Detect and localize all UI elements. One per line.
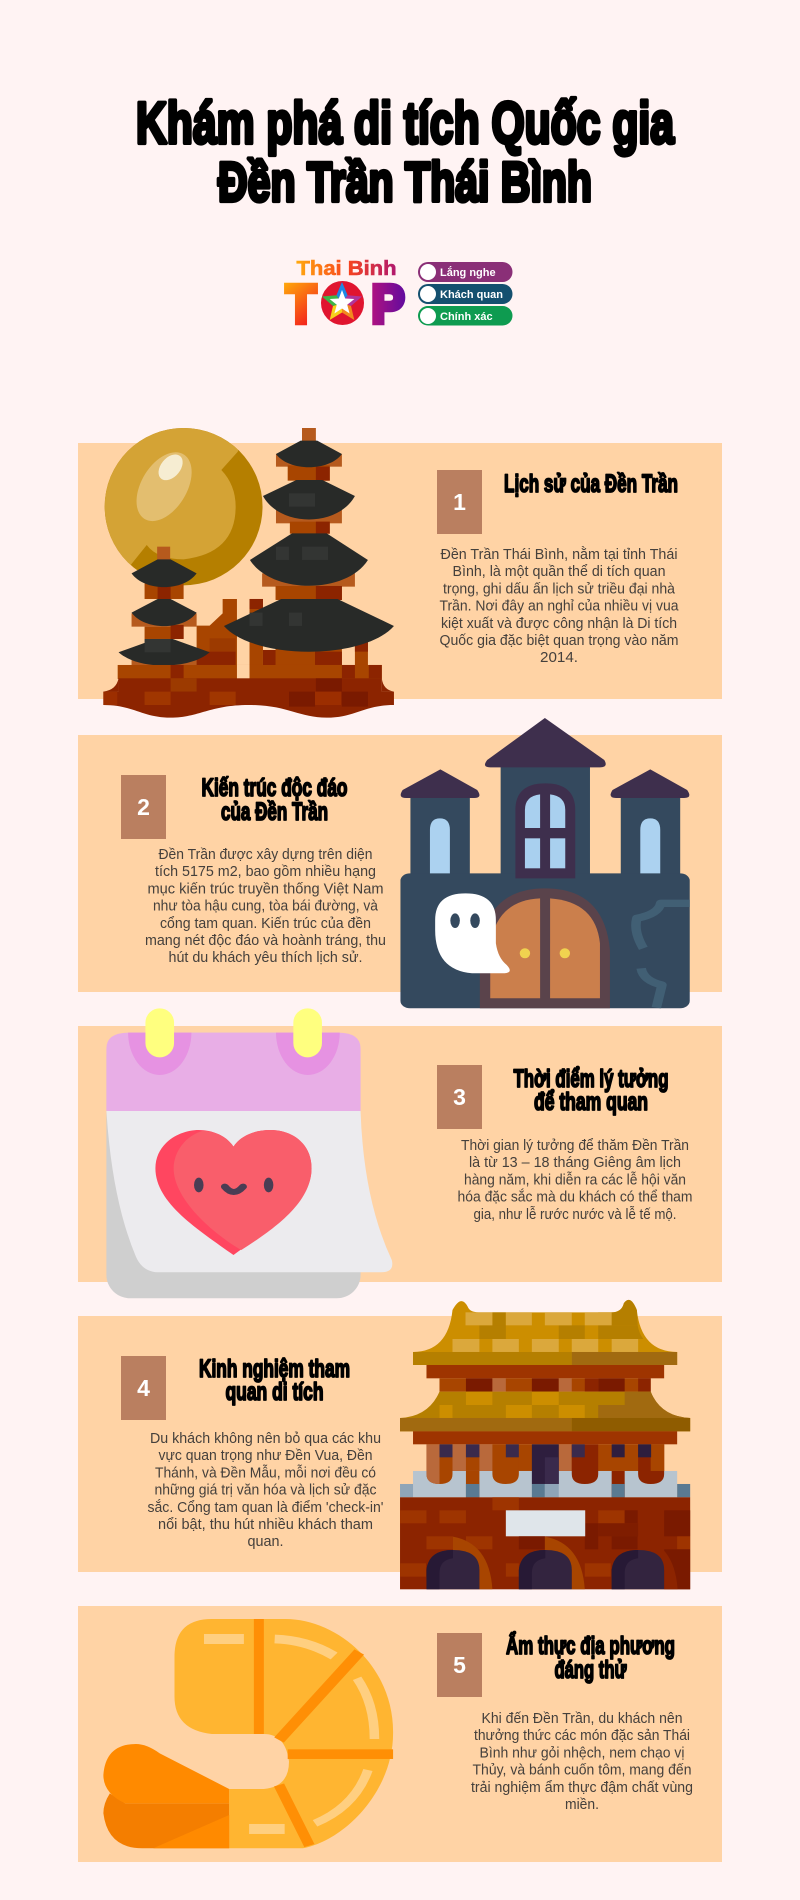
body 1: Đền Trần Thái Bình, nằm tại tỉnh Thái xyxy=(440,546,678,563)
body 1 xyxy=(440,546,679,666)
body 2: tích 5175 m2, bao gồm nhiều hạng xyxy=(155,863,376,880)
body 1: 2014. xyxy=(540,649,578,666)
heading 5 xyxy=(506,1631,675,1684)
body 5: Khi đến Đền Trần, du khách nên xyxy=(482,1710,682,1727)
body 1: kiệt xuất và được công nhận là Di tích xyxy=(441,615,677,632)
left tower body xyxy=(145,583,184,599)
body 1: Bình, là một quần thể di tích quan xyxy=(452,563,666,580)
body 1: trọng, ghi dấu ấn lịch sử triều đại nhà xyxy=(443,580,676,597)
icon: calendar with heart xyxy=(106,1008,392,1298)
body 5 xyxy=(471,1710,693,1813)
body 3: hóa đặc sắc mà du khách có thể tham xyxy=(458,1189,692,1206)
infographic canvas xyxy=(78,96,722,1862)
logo: Thai Binh TOP: Thai Binh xyxy=(296,258,396,280)
roofs xyxy=(132,559,197,587)
icon: haunted castle xyxy=(400,718,690,1008)
middle buildings xyxy=(197,599,237,678)
body 3: hàng năm, khi diễn ra các lễ hội văn xyxy=(464,1171,686,1188)
body 2: Đền Trần được xây dựng trên diện xyxy=(158,846,372,863)
heading 2: của Đền Trần xyxy=(221,798,328,826)
body 2: mục kiến trúc truyền thống Việt Nam xyxy=(148,880,384,897)
body 1: Quốc gia đặc biệt quan trọng vào năm xyxy=(440,632,678,649)
number 1 xyxy=(437,470,482,534)
body 5: trải nghiệm ẩm thực đậm chất vùng xyxy=(471,1779,693,1796)
badges xyxy=(418,262,512,326)
body 3: gia, như lễ rước nước và lễ tế mộ. xyxy=(474,1206,676,1223)
heading 5: Ẩm thực địa phương xyxy=(506,1631,675,1660)
body 2: hút du khách yêu thích lịch sử. xyxy=(168,949,362,966)
body 2: mang nét độc đáo và hoành tráng, thu xyxy=(145,932,386,949)
heading 4 xyxy=(199,1355,350,1406)
badge: Chính xác: Chính xác xyxy=(440,311,493,323)
body 3: Thời gian lý tưởng để thăm Đền Trần xyxy=(461,1137,689,1154)
number 4: 4 xyxy=(137,1375,150,1401)
right tower body xyxy=(302,428,316,441)
body 2: như tòa hậu cung, tòa bái đường, và xyxy=(153,898,379,915)
heading 2: Kiến trúc độc đáo xyxy=(202,774,348,802)
icon: temple gate xyxy=(400,1300,690,1589)
panel 4: kinh nghiệm xyxy=(78,1300,722,1589)
body 5: miền. xyxy=(565,1796,599,1813)
body 5: Thủy, và bánh cuốn tôm, mang đến xyxy=(472,1762,692,1779)
body 2: cổng tam quan. Kiến trúc của đền xyxy=(160,915,371,932)
heading 4: Kinh nghiệm tham xyxy=(199,1355,350,1383)
number 4 xyxy=(121,1356,166,1420)
heading 5: đáng thử xyxy=(554,1656,627,1684)
body 4 xyxy=(148,1430,384,1550)
number 1: 1 xyxy=(453,489,466,515)
panel 2: kiến trúc xyxy=(78,718,722,1008)
number 3: 3 xyxy=(453,1084,466,1110)
heading 1: Lịch sử của Đền Trần xyxy=(504,470,678,498)
body 4: những giá trị văn hóa và lịch sử đặc xyxy=(154,1482,377,1499)
panel 5: ẩm thực xyxy=(78,1606,722,1862)
body 3: là từ 13 – 18 tháng Giêng âm lịch xyxy=(469,1154,681,1171)
body 3 xyxy=(458,1137,692,1223)
logo: Thai Binh TOP xyxy=(286,258,404,334)
icon: pagoda and moon xyxy=(86,420,394,718)
badge: Khách quan: Khách quan xyxy=(440,289,503,301)
badge: Lắng nghe: Lắng nghe xyxy=(440,266,496,279)
body 4: Thánh, và Đền Mẫu, mỗi nơi đều có xyxy=(155,1464,376,1481)
body 5: Bình như gỏi nhệch, nem chạo vị xyxy=(480,1744,684,1761)
heading 3: để tham quan xyxy=(534,1088,648,1116)
panel 1: lịch sử xyxy=(78,420,722,718)
body 5: thưởng thức các món đặc sản Thái xyxy=(474,1727,690,1744)
number 3 xyxy=(437,1065,482,1129)
title xyxy=(136,91,675,213)
body 4: vực quan trọng như Đền Vua, Đền xyxy=(158,1447,372,1464)
heading 2 xyxy=(202,774,348,826)
heading 4: quan di tích xyxy=(226,1378,324,1406)
logo: Thai Binh TOP: T xyxy=(286,274,316,334)
body 4: sắc. Cổng tam quan là điểm 'check-in' xyxy=(148,1499,384,1516)
heading 3: Thời điểm lý tưởng xyxy=(514,1065,668,1093)
number 5 xyxy=(437,1633,482,1697)
number 2 xyxy=(121,775,166,839)
body 2 xyxy=(145,846,386,966)
base xyxy=(118,665,382,679)
icon: shrimp xyxy=(103,1619,393,1848)
panel 3: thời điểm xyxy=(78,1008,722,1298)
number 2: 2 xyxy=(137,794,150,820)
body 4: Du khách không nên bỏ qua các khu xyxy=(150,1430,381,1447)
logo: Thai Binh TOP: P xyxy=(372,274,404,334)
heading 3 xyxy=(514,1065,668,1116)
title: Đền Trần Thái Bình xyxy=(218,150,592,213)
body 4: quan. xyxy=(248,1533,284,1550)
body 1: Trần. Nơi đây an nghỉ của nhiều vị vua xyxy=(440,598,679,615)
number 5: 5 xyxy=(453,1652,466,1678)
body 4: nổi bật, thu hút nhiều khách tham xyxy=(158,1516,373,1533)
